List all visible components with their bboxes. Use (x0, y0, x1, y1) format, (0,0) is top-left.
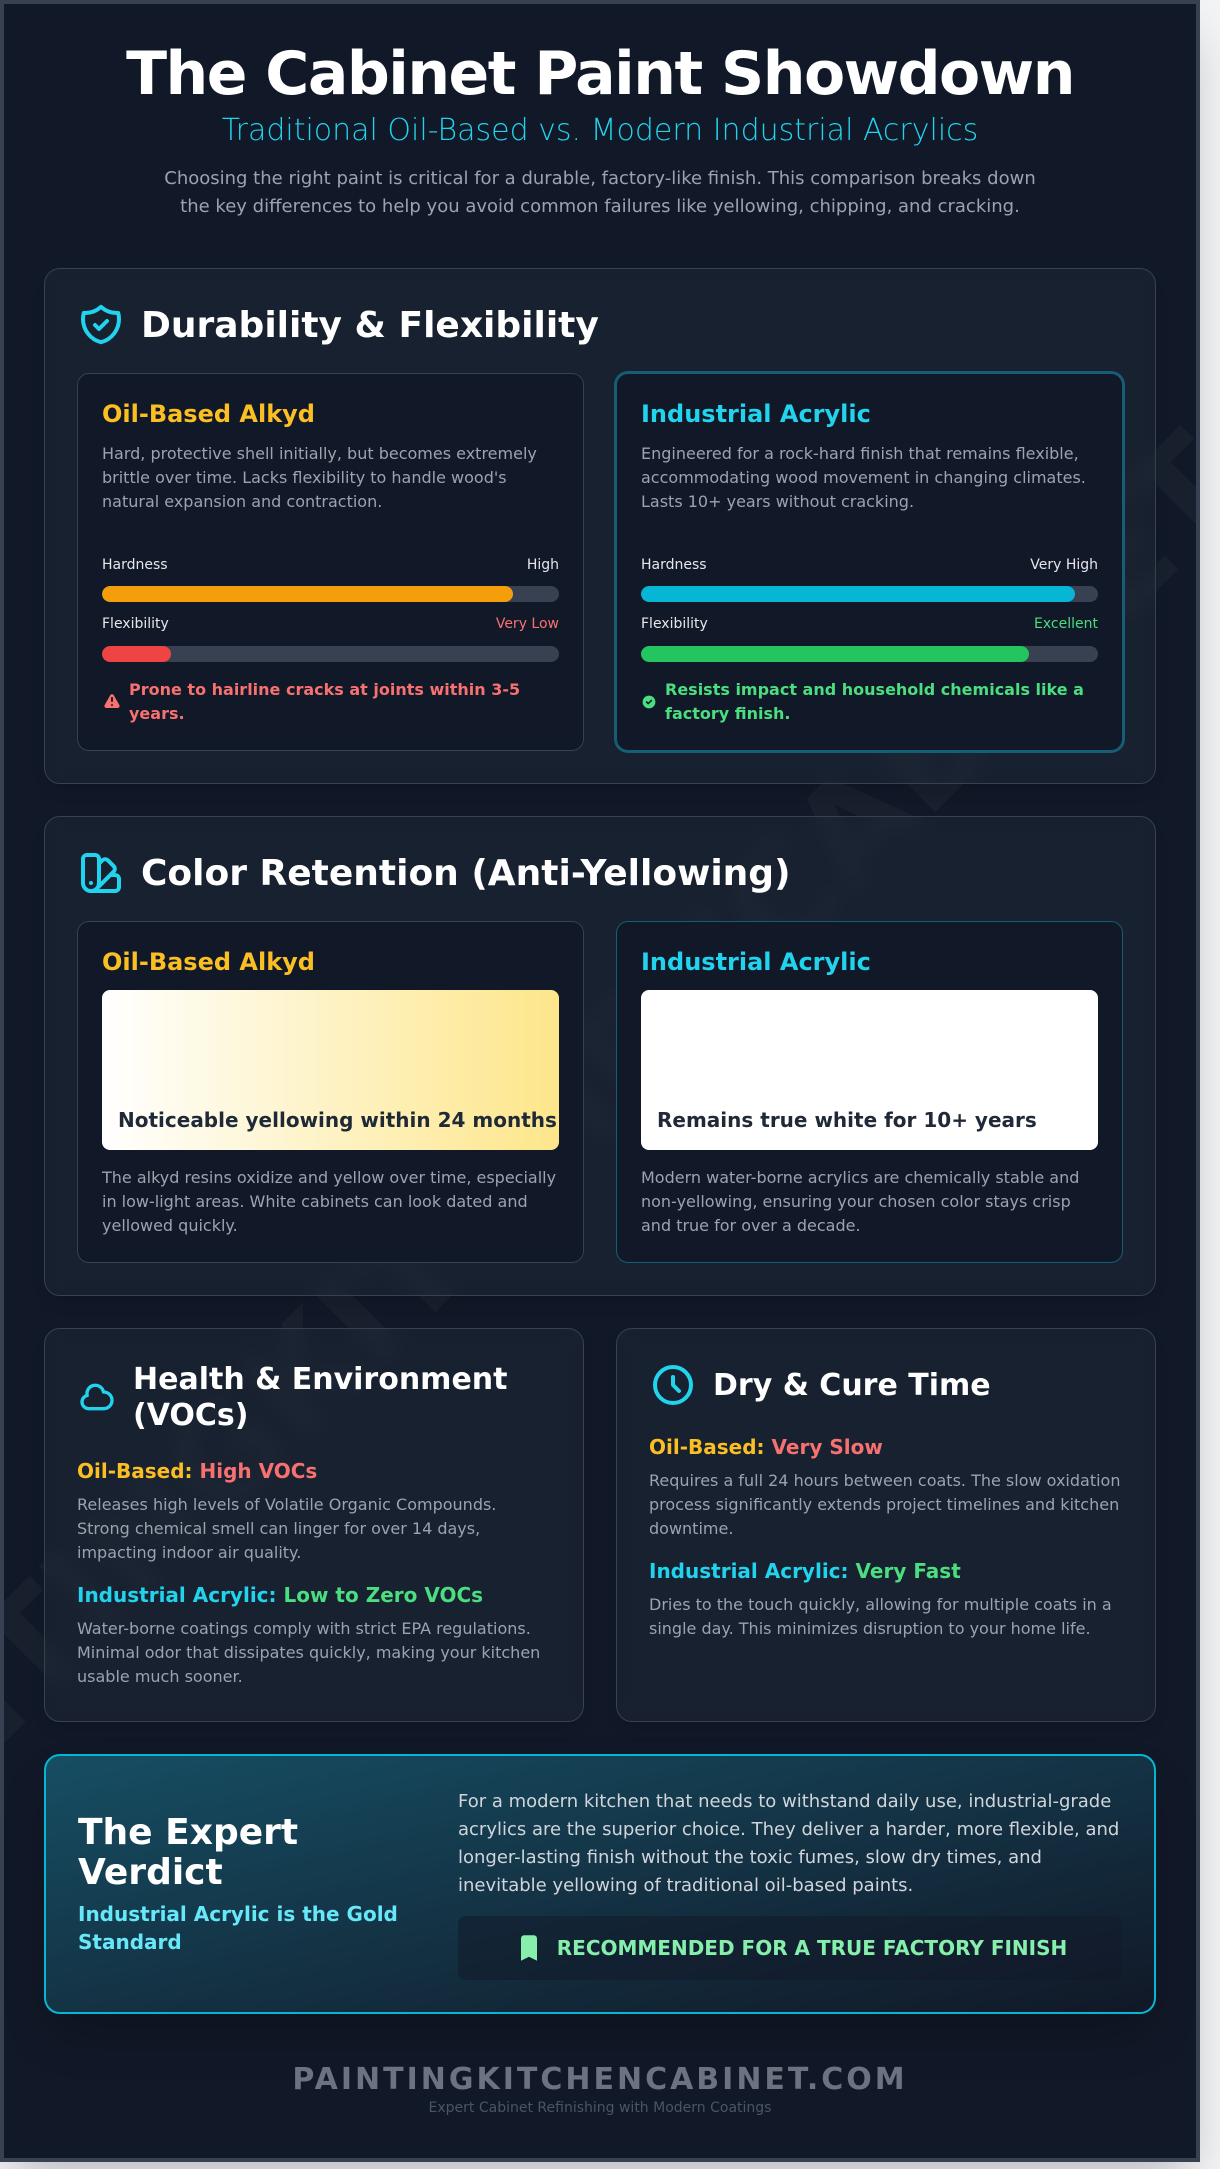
footer tagline: Expert Cabinet Refinishing with Modern Coatings (429, 2100, 771, 2116)
card: acrylic durability (616, 373, 1123, 751)
hardness bar (641, 586, 1098, 602)
recommendation badge (458, 1916, 1122, 1980)
icon: shield check (81, 304, 121, 344)
hardness label: Hardness (641, 557, 707, 573)
hardness label: Very High (1030, 557, 1098, 573)
icon: cloud (80, 1384, 114, 1410)
verdict heading: The Expert Verdict (78, 1812, 298, 1893)
panel: expert verdict (44, 1754, 1156, 2014)
verdict heading: Industrial Acrylic is the Gold Standard (78, 1902, 398, 1954)
icon: color swatch (81, 853, 121, 893)
card heading: Industrial Acrylic (641, 948, 871, 976)
icon: check circle (642, 696, 656, 708)
hardness label: Hardness (102, 557, 168, 573)
flexibility label (102, 616, 559, 632)
flexibility label: Flexibility (641, 616, 708, 632)
verdict body (458, 1791, 1119, 1980)
footer brand: PAINTINGKITCHENCABINET.COM (292, 2062, 908, 2097)
card: acrylic color (616, 921, 1123, 1263)
header (126, 39, 1074, 217)
footer (292, 2062, 908, 2116)
benefit note: Resists impact and household chemicals like a factory finish. (665, 680, 1084, 723)
intro text (164, 168, 1036, 217)
verdict text: For a modern kitchen that needs to withstand daily use, industrial-grade acrylics are the superior choice. They deliver a harder, more flexible, and longer-lasting finish without the toxic fumes, slow dry times, and inevitable yellowing of traditional oil-based paints. (458, 1791, 1119, 1896)
panel: durability and flexibility (44, 268, 1156, 784)
hardness bar (102, 586, 559, 602)
heading: health: Health & Environment (VOCs) (133, 1362, 508, 1433)
recommendation badge: RECOMMENDED FOR A TRUE FACTORY FINISH (557, 1936, 1067, 1960)
oil-based VOC text: Releases high levels of Volatile Organic Compounds. Strong chemical smell can linger for over 14 days, impacting indoor air quality. (77, 1495, 496, 1562)
warning note: Prone to hairline cracks at joints within 3-5 years. (129, 680, 520, 723)
flexibility label: Excellent (1034, 616, 1098, 632)
heading: color retention: Color Retention (Anti-Yellowing) (141, 853, 791, 894)
icon: bookmark (521, 1935, 537, 1961)
title: The Cabinet Paint Showdown (126, 39, 1074, 109)
oil-based dry text: Requires a full 24 hours between coats. The slow oxidation process significantly extends project timelines and kitchen downtime. (649, 1471, 1120, 1538)
flexibility label: Very Low (496, 616, 559, 632)
subtitle: Traditional Oil-Based vs. Modern Industrial Acrylics (222, 113, 978, 148)
oil-based VOC rating: Oil-Based: High VOCs (77, 1459, 317, 1483)
comparison cards: color (77, 921, 1123, 1263)
card heading: Oil-Based Alkyd (102, 400, 315, 428)
acrylic dry rating: Industrial Acrylic: Very Fast (649, 1559, 961, 1583)
white swatch: Remains true white for 10+ years (657, 1108, 1037, 1132)
intro text: the key differences to help you avoid common failures like yellowing, chipping, and cracking. (180, 196, 1020, 217)
card heading: Oil-Based Alkyd (102, 948, 315, 976)
icon: clock (653, 1365, 693, 1405)
card description: Modern water-borne acrylics are chemically stable and non-yellowing, ensuring your chosen color stays crisp and true for over a decade. (641, 1168, 1079, 1235)
card: oil-based durability (77, 373, 584, 751)
card: oil-based color (77, 921, 584, 1263)
comparison cards: durability (77, 371, 1125, 753)
icon: warning triangle (104, 694, 120, 708)
acrylic VOC rating: Industrial Acrylic: Low to Zero VOCs (77, 1583, 483, 1607)
heading: durability: Durability & Flexibility (141, 305, 599, 346)
verdict heading (78, 1812, 398, 1954)
card description: Engineered for a rock-hard finish that remains flexible, accommodating wood movement in changing climates. Lasts 10+ years without cracking. (641, 444, 1086, 511)
yellowing swatch (102, 990, 559, 1150)
card description: Hard, protective shell initially, but becomes extremely brittle over time. Lacks flexibility to handle wood's natural expansion and contraction. (102, 444, 537, 511)
heading: dry time: Dry & Cure Time (713, 1368, 991, 1403)
oil-based dry rating: Oil-Based: Very Slow (649, 1435, 883, 1459)
flexibility bar (102, 646, 559, 662)
acrylic VOC text: Water-borne coatings comply with strict EPA regulations. Minimal odor that dissipates quickly, making your kitchen usable much sooner. (77, 1619, 540, 1686)
intro text: Choosing the right paint is critical for a durable, factory-like finish. This comparison breaks down (164, 168, 1036, 189)
flexibility label (641, 616, 1098, 632)
flexibility bar (641, 646, 1098, 662)
flexibility label: Flexibility (102, 616, 169, 632)
white swatch (641, 990, 1098, 1150)
panel: dry and cure time (616, 1328, 1156, 1722)
hardness label (102, 557, 559, 573)
card description: The alkyd resins oxidize and yellow over time, especially in low-light areas. White cabinets can look dated and yellowed quickly. (102, 1168, 556, 1235)
hardness label: High (527, 557, 559, 573)
hardness label (641, 557, 1098, 573)
acrylic dry text: Dries to the touch quickly, allowing for multiple coats in a single day. This minimizes disruption to your home life. (649, 1595, 1112, 1638)
card heading: Industrial Acrylic (641, 400, 871, 428)
panel: color retention (44, 816, 1156, 1296)
yellowing swatch: Noticeable yellowing within 24 months (118, 1108, 557, 1132)
panel: health and environment (44, 1328, 584, 1722)
